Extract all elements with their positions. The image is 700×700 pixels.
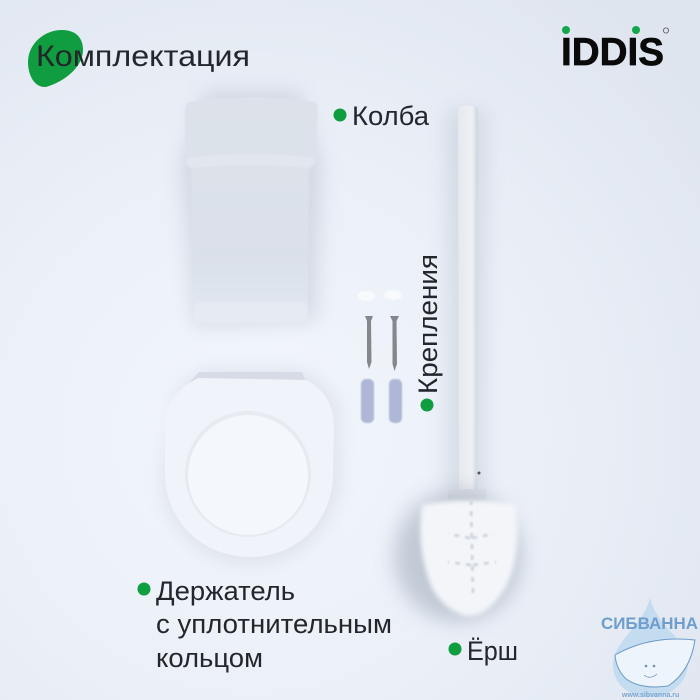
bathtub face <box>644 665 657 677</box>
brush <box>394 106 522 622</box>
title <box>28 30 250 87</box>
icon: green blob <box>28 30 83 87</box>
caps <box>357 290 402 301</box>
label: Держатель с уплотнительным кольцом: с уплотнительным <box>156 609 392 639</box>
label: Колба: Колба <box>352 101 430 131</box>
watermark: Сибванна <box>601 597 698 699</box>
label: Ёрш: Ёрш <box>467 636 518 666</box>
brush head <box>394 490 522 622</box>
holder with ring <box>163 372 338 562</box>
screws <box>365 316 399 371</box>
title: Комплектация <box>36 40 250 73</box>
brush handle <box>446 106 486 501</box>
watermark: Сибванна: www.sibvanna.ru <box>621 692 679 699</box>
logo: IDDIS: IDDIS <box>561 31 664 74</box>
label: Держатель с уплотнительным кольцом: Держатель <box>156 576 295 606</box>
mounting hardware <box>357 290 402 423</box>
label: Держатель с уплотнительным кольцом: кольцом <box>156 643 263 673</box>
watermark: Сибванна: СИБВАННА <box>601 614 698 633</box>
glass flask <box>180 92 322 326</box>
label: Крепления: Крепления <box>413 254 443 394</box>
label: Держатель с уплотнительным кольцом <box>138 576 392 673</box>
label: Ёрш <box>448 636 518 666</box>
wall plugs <box>361 379 402 423</box>
